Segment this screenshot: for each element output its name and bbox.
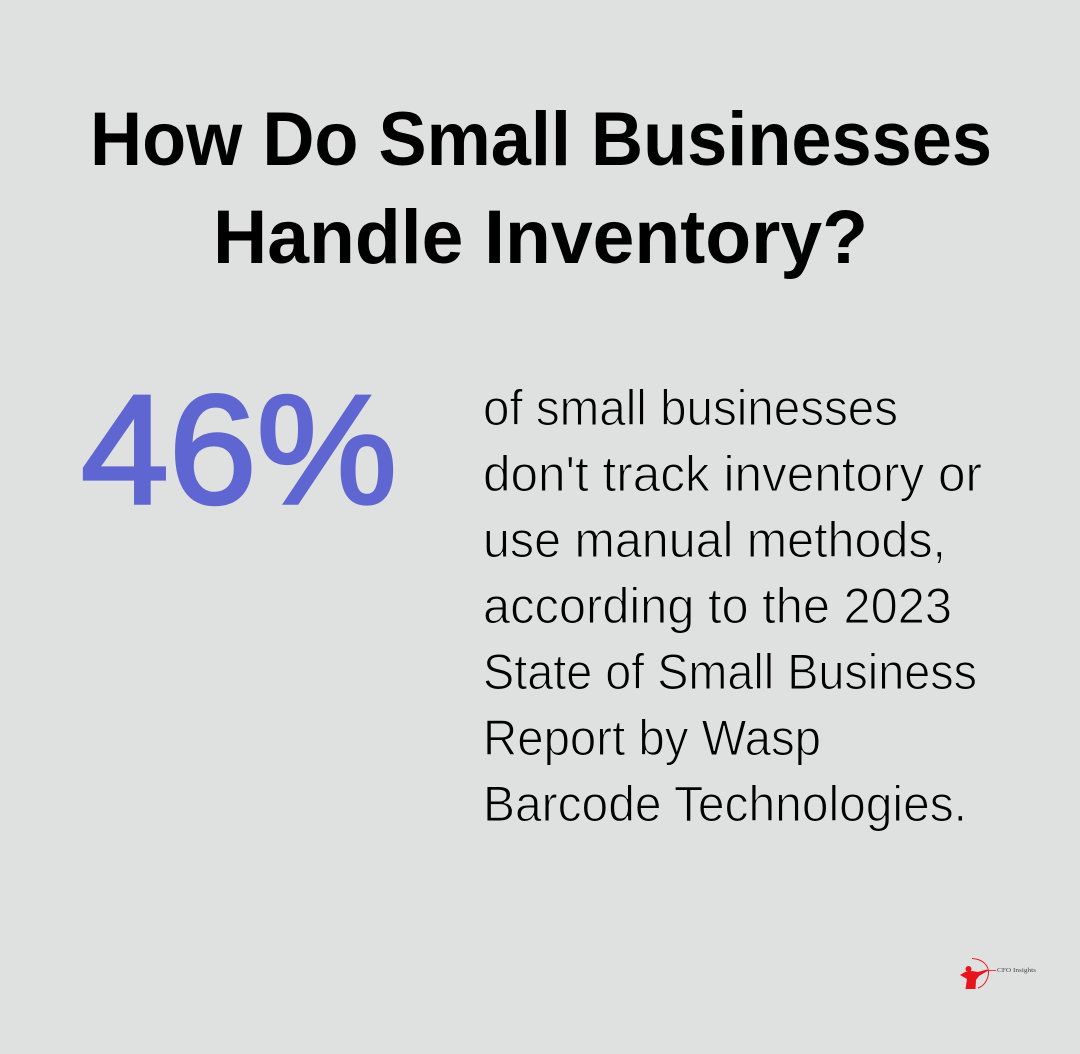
description text: according to the 2023 (483, 578, 952, 634)
logo wordmark: CFO Insights (997, 967, 1037, 974)
title: Handle Inventory? (213, 195, 868, 280)
icon: archer with bow (960, 958, 996, 989)
description text: Report by Wasp (483, 710, 821, 766)
logo: CFO Insights archer (960, 958, 1037, 989)
big statistic: 46%: 46% (81, 363, 397, 536)
title (90, 97, 992, 280)
description text: use manual methods, (483, 512, 946, 568)
description text: Barcode Technologies. (483, 776, 967, 832)
description text: don't track inventory or (483, 446, 982, 502)
description text: State of Small Business (483, 644, 977, 700)
description text (483, 380, 982, 832)
title: How Do Small Businesses (90, 97, 992, 182)
description text: of small businesses (483, 380, 898, 436)
